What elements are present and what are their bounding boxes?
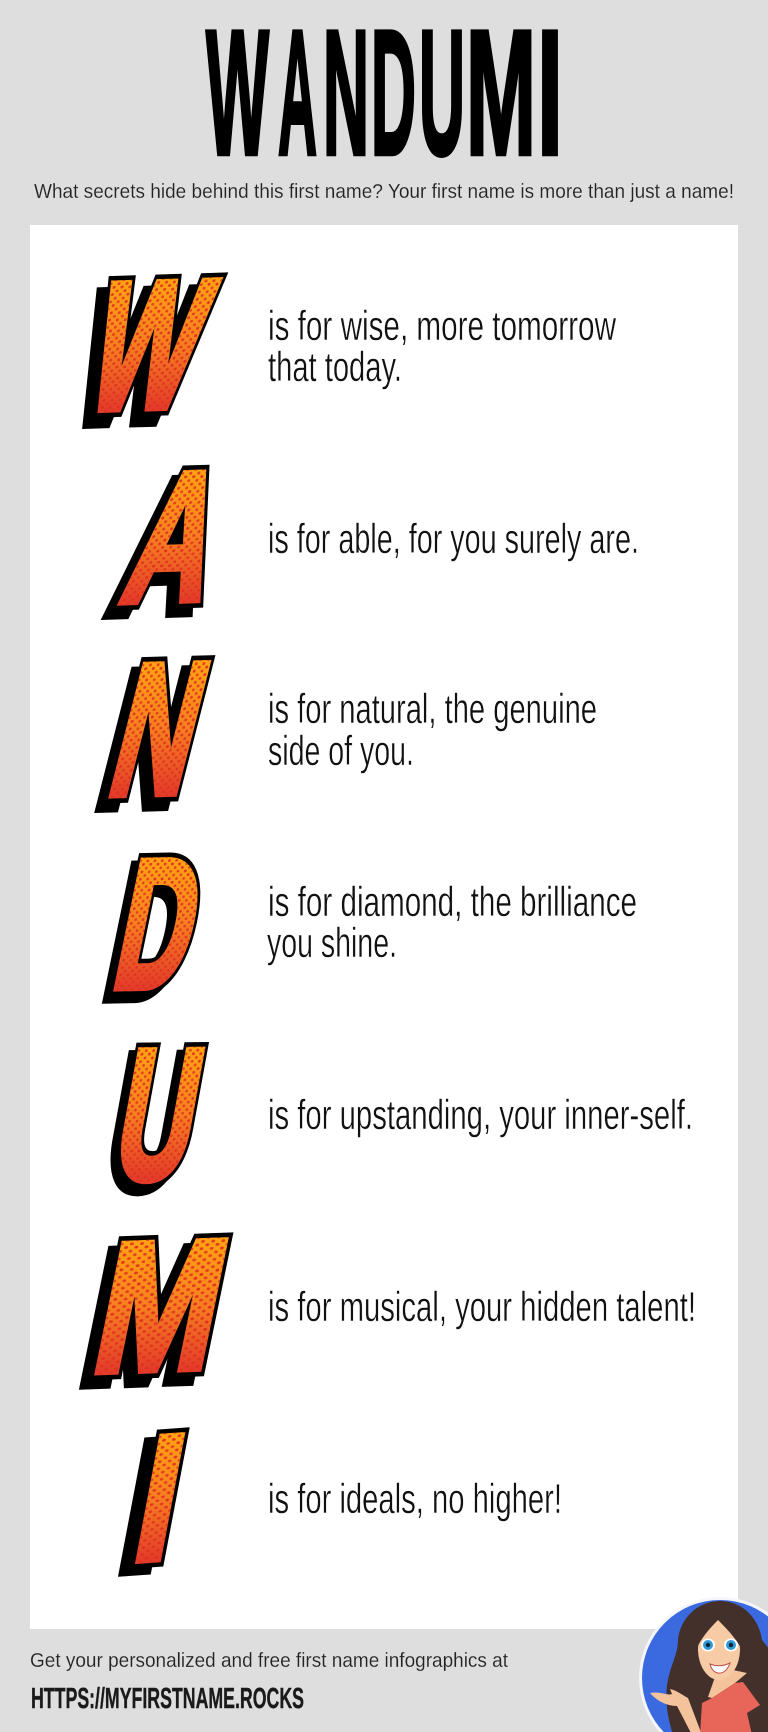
letter I: I [122, 1398, 198, 1600]
row: W [58, 242, 616, 461]
avatar eyes [701, 1638, 738, 1652]
letter M: M [80, 1201, 243, 1412]
footer url: HTTPS://MYFIRSTNAME.ROCKS [31, 1683, 304, 1715]
letter N: N [84, 634, 216, 845]
letter I: I [122, 1398, 198, 1600]
row: D [93, 821, 637, 1036]
row: N [84, 624, 597, 845]
icon: avatar [639, 1597, 768, 1732]
avatar mouth [710, 1663, 730, 1673]
letter W: W [58, 254, 218, 461]
letter U: U [103, 1012, 216, 1219]
caption W: is for wise, more tomorrow [268, 302, 616, 349]
letter D: D [101, 821, 217, 1028]
letter N: N [94, 624, 226, 836]
avatar shirt [700, 1682, 760, 1732]
avatar hair fringe [698, 1618, 740, 1646]
letter N: N [94, 624, 226, 836]
letter M: M [69, 1210, 232, 1421]
footer text: Get your personalized and free first name infographics at [30, 1650, 508, 1672]
letter U: U [103, 1012, 216, 1219]
avatar arm [650, 1689, 702, 1732]
letter A: A [107, 433, 246, 642]
letter N: N [94, 624, 226, 836]
row: M [69, 1201, 696, 1421]
avatar neck [708, 1670, 747, 1698]
letter A: A [107, 433, 246, 642]
letter D: D [101, 821, 217, 1028]
caption N: side of you. [268, 727, 414, 774]
letter A: A [97, 443, 235, 651]
letter D: D [101, 821, 217, 1028]
panel: white card [30, 225, 738, 1629]
row: A [97, 433, 639, 651]
letter I: I [109, 1405, 186, 1607]
letter W: W [70, 242, 230, 450]
avatar hair [666, 1601, 768, 1732]
caption I: is for ideals, no higher! [268, 1475, 562, 1522]
letter U: U [103, 1012, 216, 1219]
caption W: that today. [268, 343, 402, 390]
row: U [95, 1012, 693, 1227]
subtitle: What secrets hide behind this first name? Your first name is more than just a name! [34, 180, 734, 203]
letter U: U [95, 1019, 209, 1227]
letter M: M [80, 1201, 243, 1412]
avatar face [698, 1618, 740, 1680]
letter W: W [70, 242, 230, 450]
letter W: W [70, 242, 230, 450]
letter M: M [80, 1201, 243, 1412]
letter D: D [93, 829, 210, 1036]
letter A: A [107, 433, 246, 642]
letter I: I [122, 1398, 198, 1600]
row: I [109, 1398, 562, 1607]
caption D: you shine. [267, 919, 397, 966]
caption N: is for natural, the genuine [268, 685, 597, 732]
